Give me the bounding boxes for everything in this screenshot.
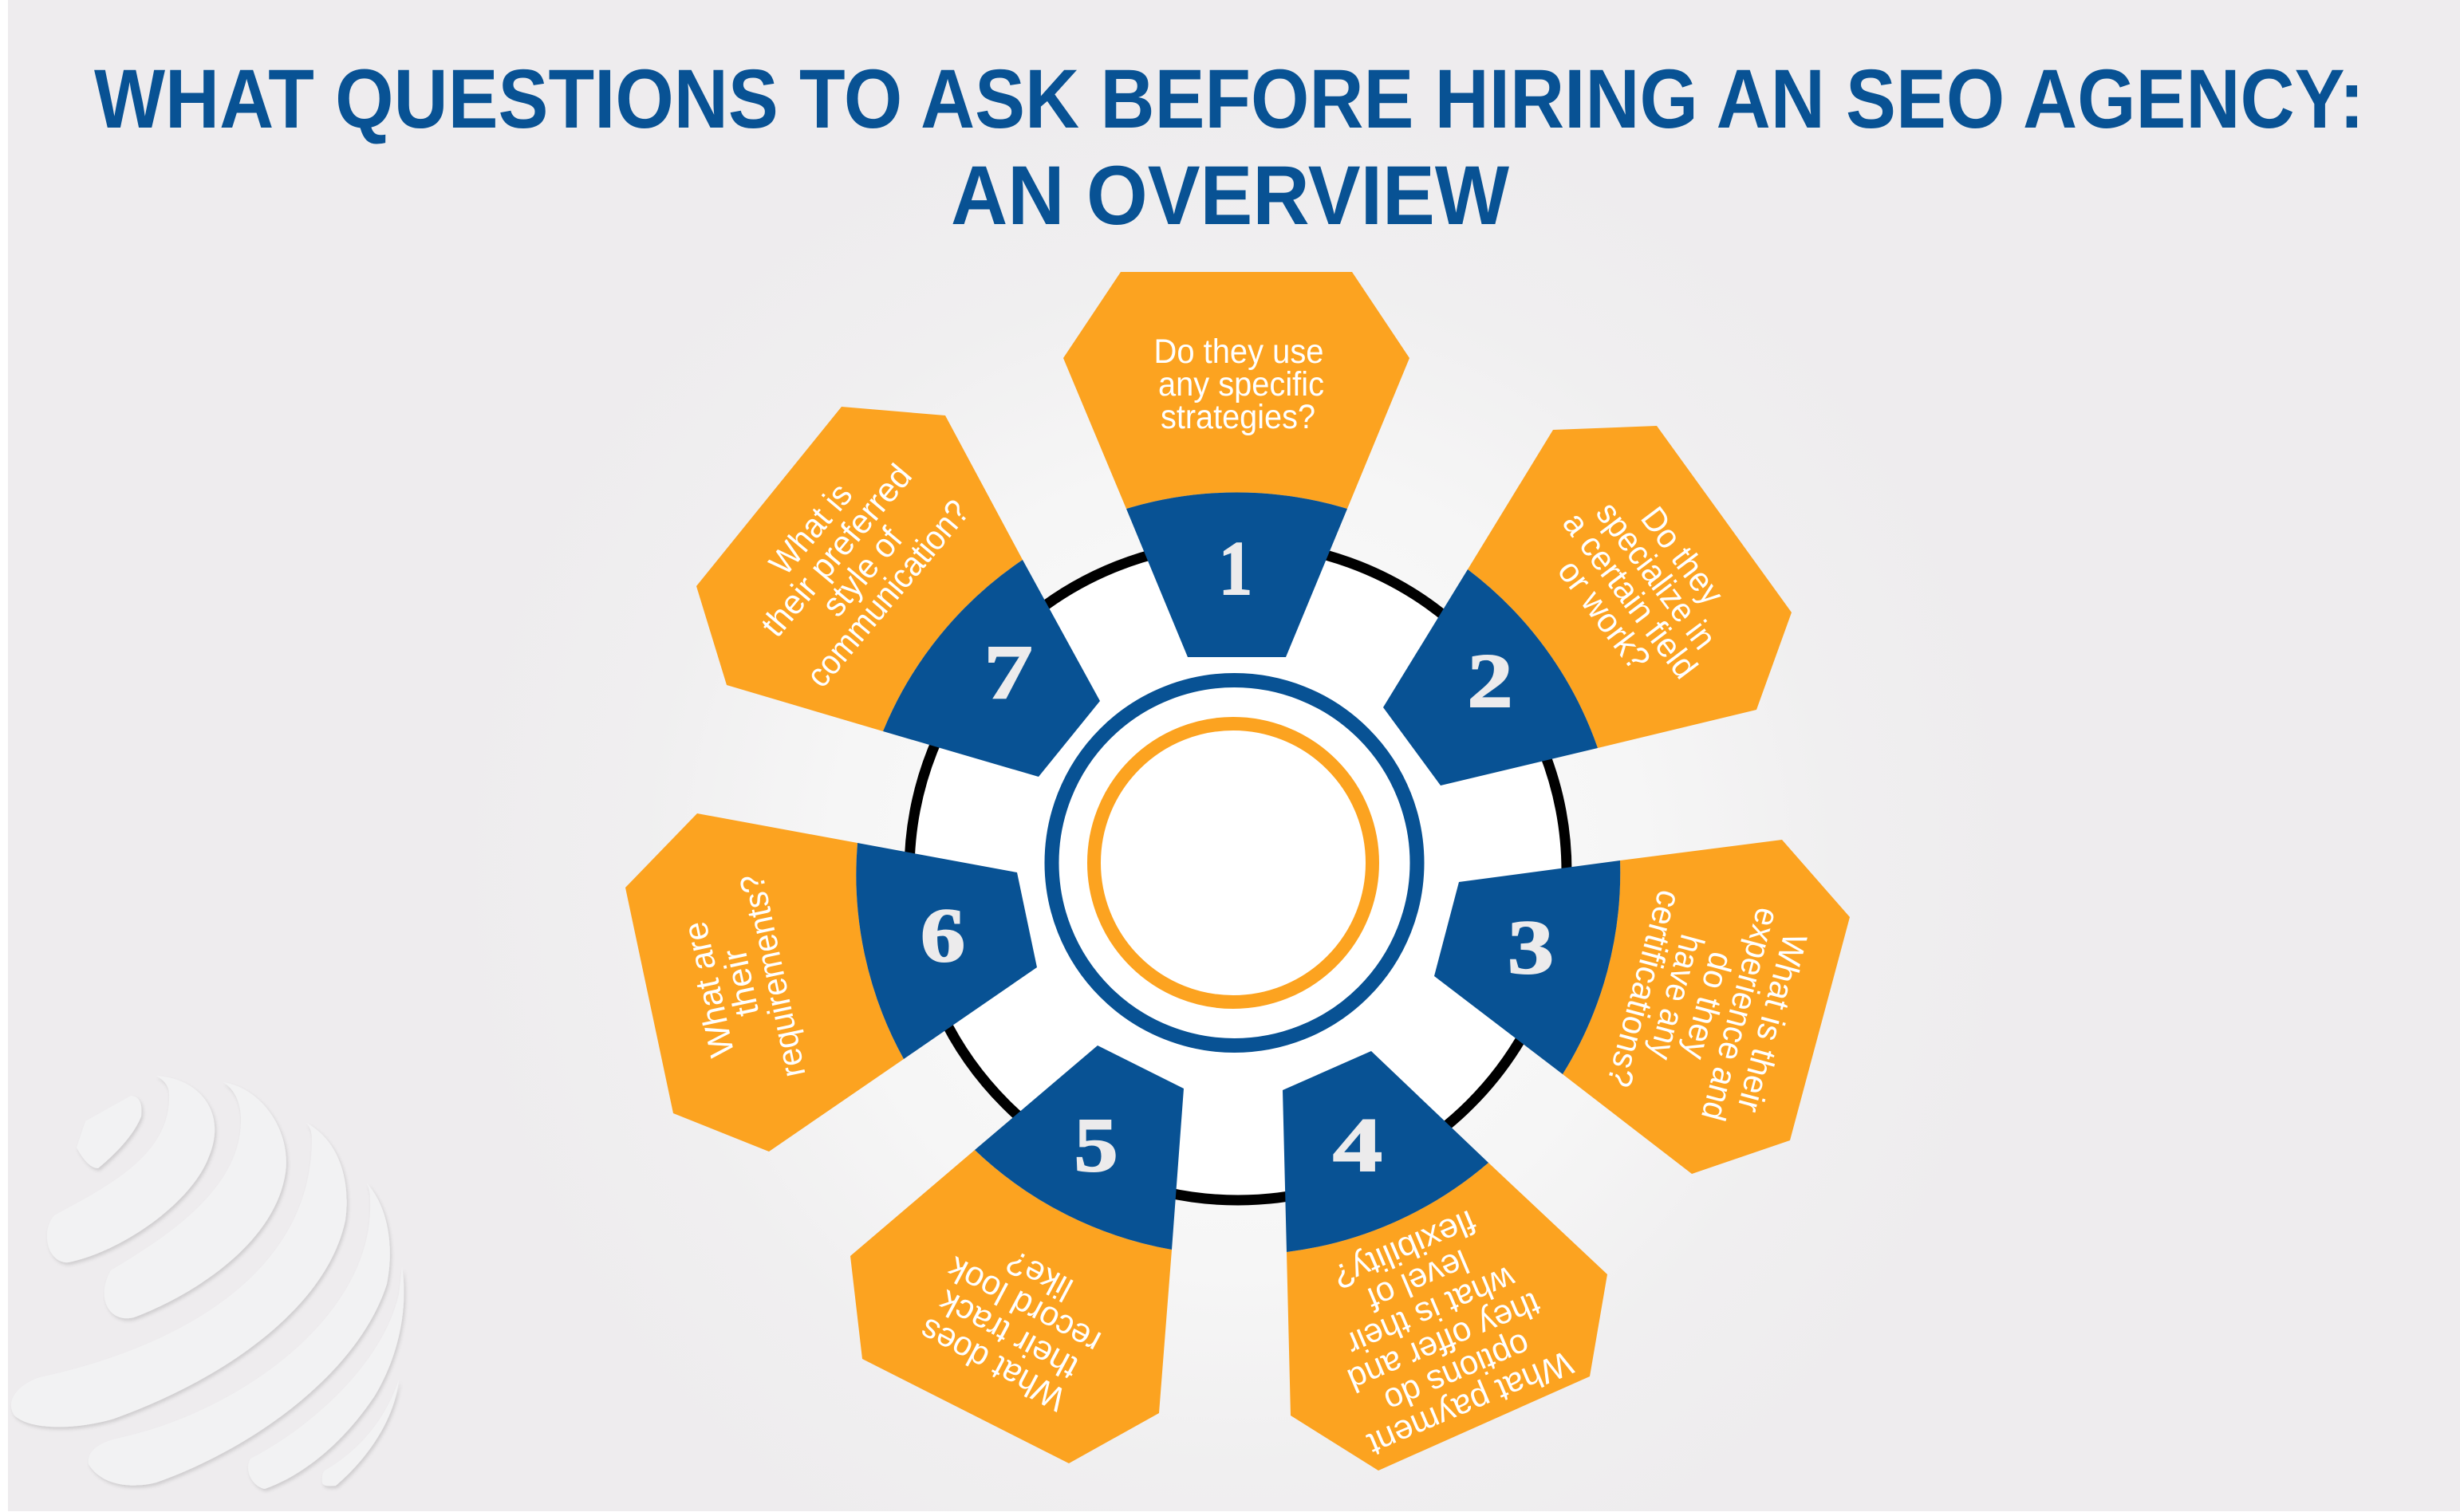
number 4: 4 <box>1333 1102 1382 1187</box>
text: do they use any specific strategies <box>1153 333 1324 436</box>
text: do they specialize: specialize in <box>1588 494 1724 656</box>
panel: question 4 <box>1283 1051 1607 1471</box>
text: payment options and flexibility: they offer and <box>1342 1284 1546 1400</box>
blue inner segment 1 <box>1126 492 1347 657</box>
text: do they specialize: Do they <box>1633 500 1731 612</box>
text: track record <box>909 1219 1123 1420</box>
text: do they use any specific strategies: Do they use <box>1153 333 1324 371</box>
orange outer segment 6 <box>625 813 904 1152</box>
panel: question 1 <box>1063 272 1409 657</box>
orange outer segment 4 <box>1287 1163 1607 1471</box>
title: AN OVERVIEW <box>951 149 1509 242</box>
watermark: globe <box>11 1076 404 1489</box>
number 3: 3 <box>1508 904 1554 990</box>
text: communication style: their preferred <box>754 457 920 644</box>
text: experience and certifications: have any <box>1641 931 1711 1064</box>
centre blue ring <box>1051 680 1417 1045</box>
text: do they specialize: or work? <box>1550 553 1658 678</box>
text: do they use any specific strategies: strategies? <box>1161 398 1315 436</box>
blue inner segment 3 <box>1434 860 1620 1074</box>
panel: question 7 <box>696 407 1100 777</box>
text: track record: their track <box>932 1282 1084 1387</box>
text: communication style: communication? <box>799 493 977 695</box>
text: requirements <box>668 871 814 1094</box>
orange outer segment 2 <box>1468 426 1792 748</box>
orange outer segment 5 <box>850 1150 1172 1463</box>
panel: question 5 <box>850 1045 1184 1463</box>
number 1: 1 <box>1219 526 1252 611</box>
text: experience and certifications: What is their <box>1729 929 1814 1116</box>
number 5: 5 <box>1074 1102 1118 1187</box>
orange outer segment 7 <box>696 407 1023 731</box>
text: payment options and flexibility: what is their <box>1341 1258 1521 1364</box>
text: track record: record look <box>940 1249 1107 1361</box>
text: experience and certifications: experience and <box>1693 904 1787 1124</box>
title <box>94 53 2364 242</box>
text: do they use any specific strategies: any specific <box>1158 365 1324 404</box>
panel: question 2 <box>1383 426 1792 786</box>
outer white disc with black ring <box>909 543 1567 1200</box>
text: payment options and flexibility <box>1296 1189 1579 1463</box>
text: payment options and flexibility: level of <box>1361 1242 1474 1318</box>
text: communication style <box>722 428 977 695</box>
text: do they specialize: a certain field <box>1555 505 1705 686</box>
text: payment options and flexibility: options do <box>1378 1325 1536 1420</box>
text: requirements: What are <box>676 918 742 1061</box>
blue inner segment 5 <box>975 1045 1184 1250</box>
blue inner segment 4 <box>1283 1051 1488 1252</box>
text: track record: like? <box>1000 1242 1079 1309</box>
panel: question 6 <box>625 813 1037 1152</box>
text: experience and certifications <box>1597 878 1819 1133</box>
orange outer segment 1 <box>1063 272 1409 509</box>
number 2: 2 <box>1468 638 1512 723</box>
blue inner segment 6 <box>856 843 1037 1059</box>
orange outer segment 3 <box>1563 840 1850 1174</box>
text: do they specialize <box>1529 466 1757 706</box>
text: track record: What does <box>913 1310 1072 1419</box>
panel: question 3 <box>1434 840 1850 1174</box>
text: requirements: requirements? <box>733 871 814 1081</box>
number 6: 6 <box>921 892 965 978</box>
blue inner segment 7 <box>883 560 1100 777</box>
text: communication style: What is <box>762 476 860 582</box>
blue inner segment 2 <box>1383 569 1598 786</box>
text: requirements: their <box>716 945 767 1020</box>
text: experience and certifications: do they <box>1675 948 1741 1064</box>
text: payment options and flexibility: flexibility? <box>1328 1202 1481 1296</box>
text: experience and certifications: certifications? <box>1599 886 1689 1091</box>
centre orange ring <box>1094 724 1372 1002</box>
text: communication style: style of <box>814 520 911 624</box>
text: payment options and flexibility: What payment <box>1362 1343 1579 1463</box>
number 7: 7 <box>984 629 1032 715</box>
